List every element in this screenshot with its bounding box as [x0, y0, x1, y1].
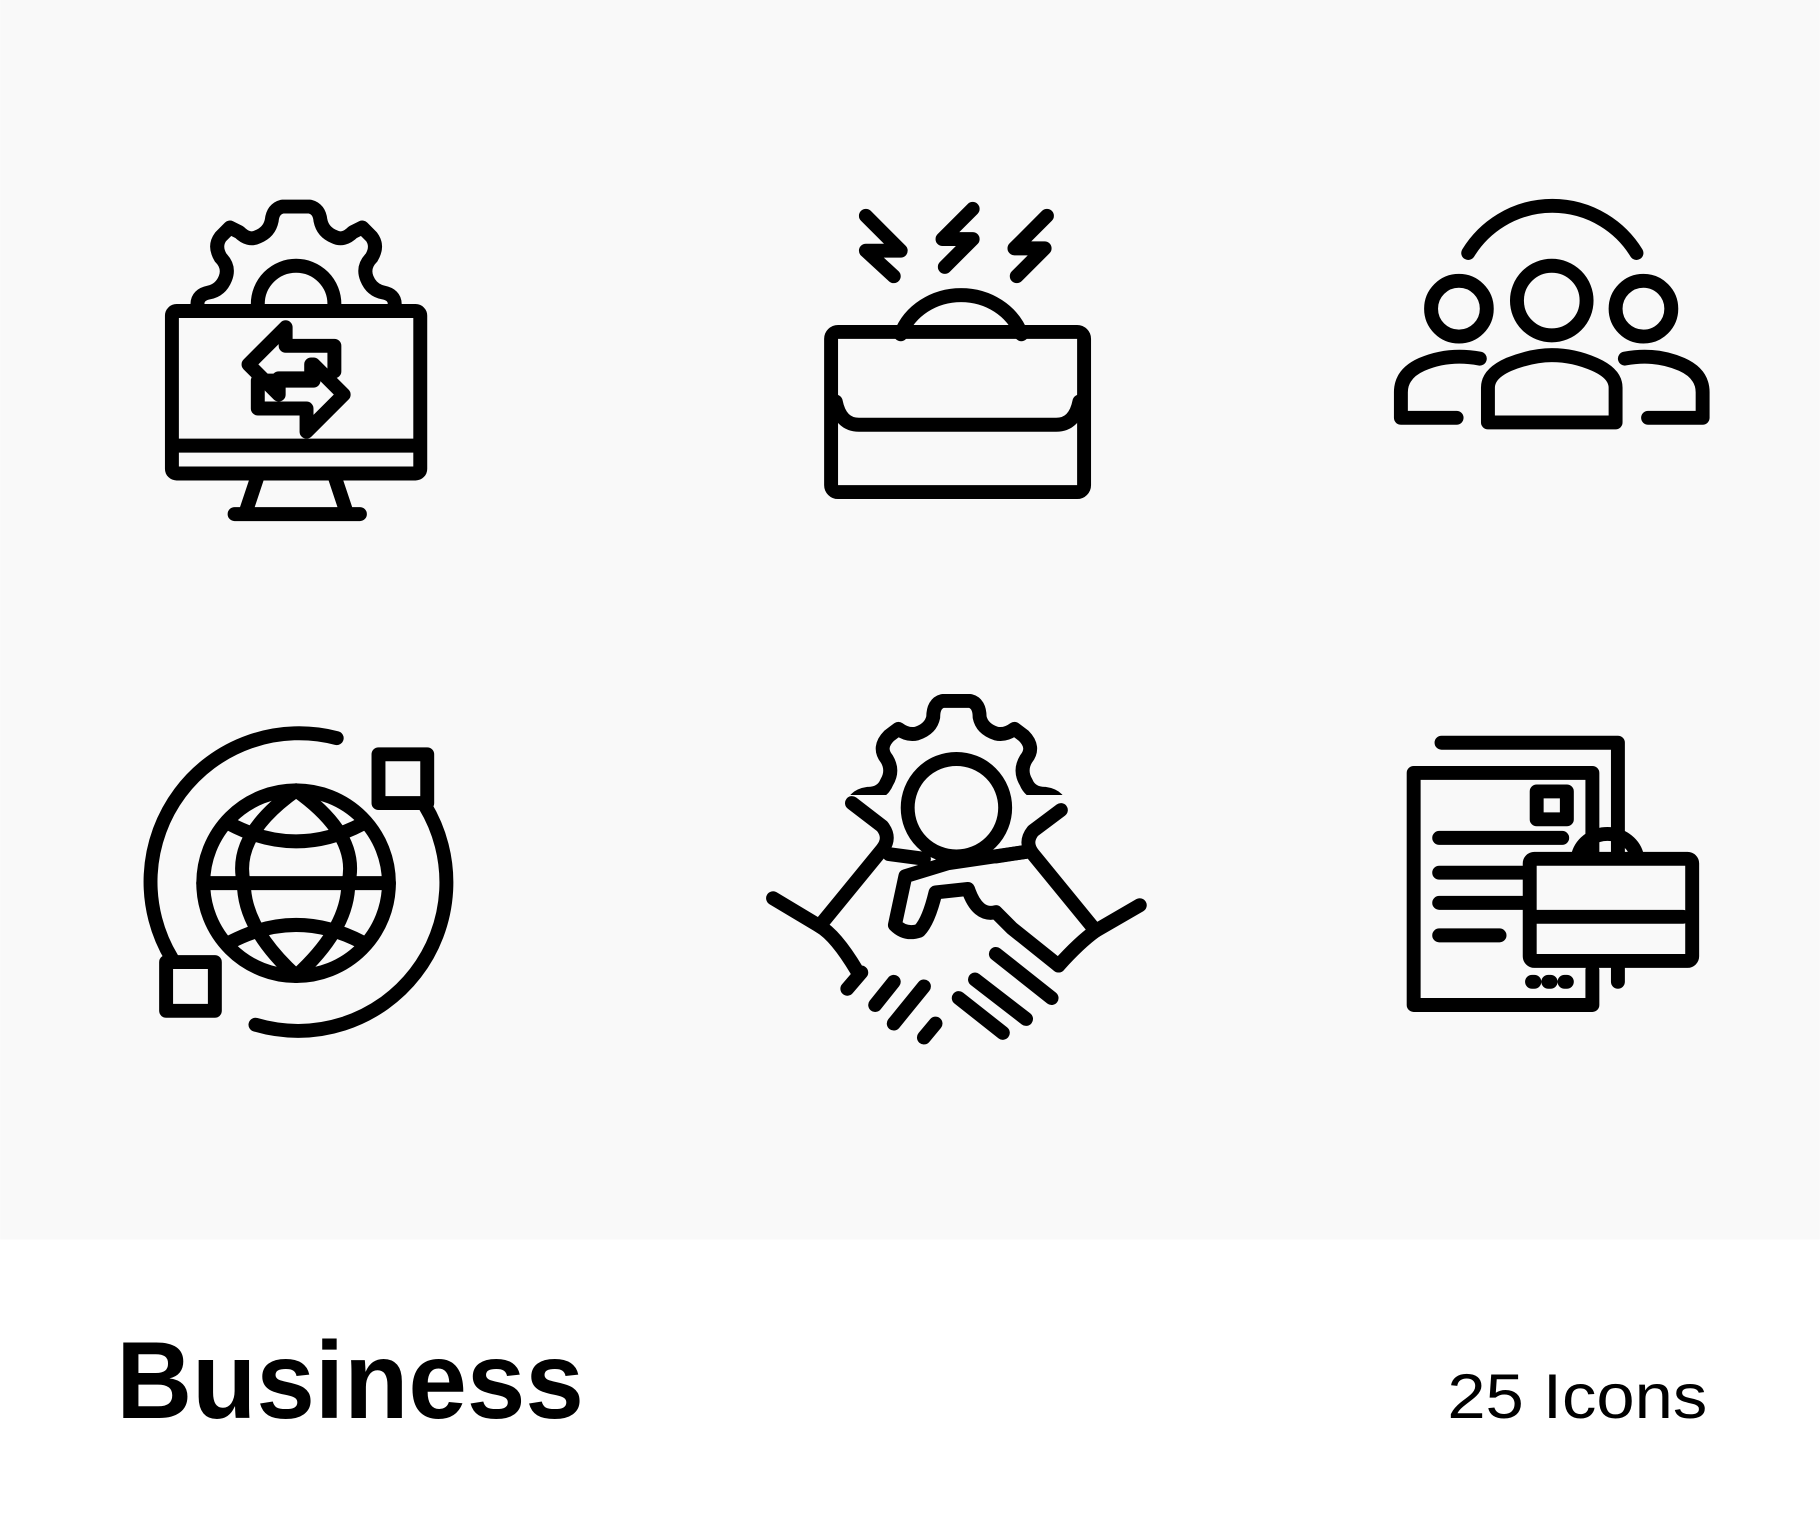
- icon: handshake with gear: [773, 701, 1140, 1037]
- icon: globe with cycle: [151, 733, 446, 1031]
- icon: documents with briefcase: [1414, 743, 1692, 1005]
- icon: team: [1401, 206, 1703, 422]
- icon: monitor with gear: [172, 207, 420, 514]
- icon: briefcase with lightning: [831, 209, 1084, 492]
- subtitle: icon count: 25 Icons: [1447, 1362, 1707, 1432]
- title: Business: [116, 1320, 584, 1442]
